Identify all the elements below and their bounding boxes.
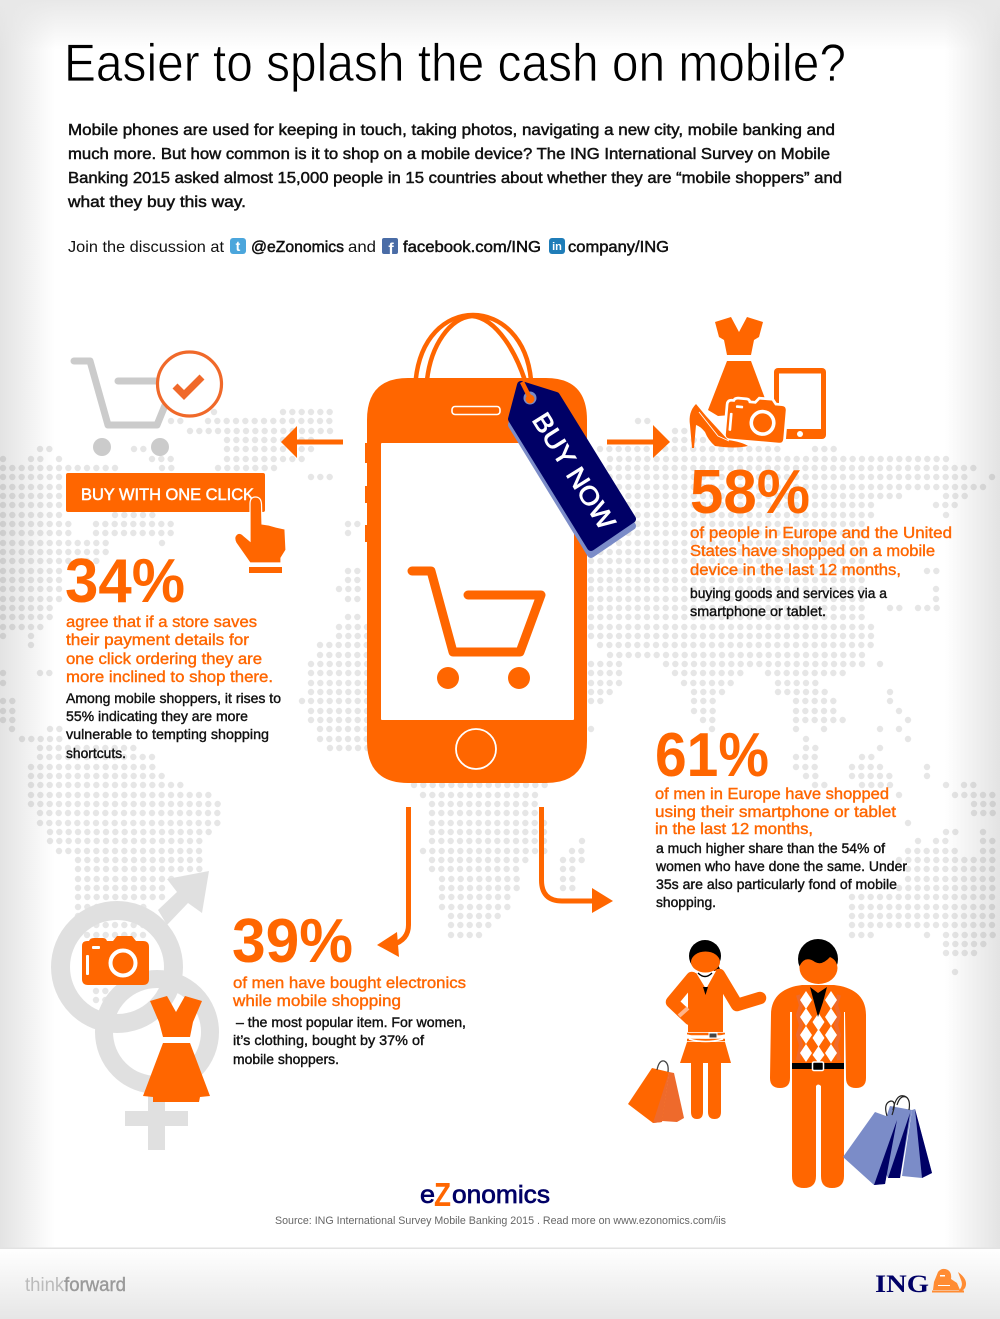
logo: eZonomics: Z <box>434 1176 451 1213</box>
stat: 39%: mobile shoppers. <box>233 1051 339 1067</box>
male symbol <box>60 871 209 1024</box>
price tag: buy now <box>512 382 632 554</box>
stat: 34%: more inclined to shop there. <box>66 669 273 686</box>
button: buy with one click: BUY WITH ONE CLICK <box>81 486 254 504</box>
stat: 61%: in the last 12 months, <box>655 821 813 838</box>
stat: 61%: of men in Europe have shopped <box>655 786 889 803</box>
stat: 39% <box>232 907 466 1067</box>
man's body <box>770 985 866 1188</box>
social links line: facebook.com/ING <box>403 239 541 256</box>
stat: 58%: of people in Europe and the United <box>690 525 952 542</box>
phone with shopping bag handles <box>365 315 587 783</box>
stat: 34%: agree that if a store saves <box>66 614 257 631</box>
social links line: company/ING <box>568 239 669 256</box>
woman's face and collar <box>691 952 720 995</box>
logo: ING with lion: ING <box>875 1271 929 1298</box>
icon: facebook: f <box>388 241 394 258</box>
title: Easier to splash the cash on mobile? <box>64 34 846 93</box>
icon: linkedin <box>549 238 565 254</box>
stat: 61%: women who have done the same. Under <box>655 858 907 874</box>
stat: 34%: Among mobile shoppers, it rises to <box>66 690 281 706</box>
dress <box>143 996 210 1102</box>
belt <box>792 1062 844 1070</box>
camera <box>82 936 149 985</box>
stat: 34%: shortcuts. <box>66 745 126 761</box>
logo: ING with lion <box>875 1269 966 1298</box>
logo: eZonomics: onomics <box>452 1181 550 1209</box>
stat: 34%: one click ordering they are <box>66 651 262 668</box>
down arrow to 39% <box>392 807 408 945</box>
stat: 61%: a much higher share than the 54% of <box>656 840 885 856</box>
stat: 61%: shopping. <box>656 894 716 910</box>
icon: pointing hand <box>235 497 286 573</box>
left arrow from phone <box>281 426 343 458</box>
icons: dress, tablet, camera, shoe <box>690 317 826 448</box>
stat: 58%: device in the last 12 months, <box>690 562 901 579</box>
social links line: and <box>348 239 376 256</box>
woman's arms <box>672 975 760 1019</box>
orange shopping bags <box>628 1061 684 1123</box>
camera <box>724 395 788 445</box>
icon: grey shopping cart with check mark <box>74 352 222 456</box>
phone body <box>365 378 587 783</box>
stat: 61%: 35s are also particularly fond of mobile <box>656 876 897 892</box>
stat: 61% <box>655 721 907 910</box>
bag handles <box>416 315 531 398</box>
stat: 39%: 39% <box>232 907 353 976</box>
stat: 34% <box>65 547 281 761</box>
stat: 58%: buying goods and services via a <box>690 585 887 601</box>
intro paragraph: much more. But how common is it to shop on a mobile device? The ING International Survey on Mobile <box>68 146 830 163</box>
stat: 61%: using their smartphone or tablet <box>655 804 897 821</box>
arrowhead: right-bending arrow <box>592 888 613 913</box>
source line: Source: ING International Survey Mobile Banking 2015 . Read more on www.ezonomics.com/iis <box>275 1215 726 1227</box>
tablet <box>774 368 826 439</box>
social links line: @eZonomics <box>251 239 344 256</box>
stat: 34%: their payment details for <box>66 632 250 649</box>
stat: 61%: 61% <box>655 721 769 790</box>
icon: facebook <box>382 238 398 258</box>
logo: eZonomics <box>420 1176 550 1213</box>
woman's body <box>680 973 731 1119</box>
speaker <box>452 406 500 414</box>
icon: cart on screen <box>412 571 541 689</box>
logo: eZonomics: e <box>420 1181 435 1209</box>
dotted world map background <box>3 412 584 1000</box>
figure: man with blue bags <box>770 939 932 1188</box>
man's head <box>798 939 838 984</box>
footer tagline: thinkforward: thinkforward <box>25 1275 126 1296</box>
stat: 39%: it’s clothing, bought by 37% of <box>233 1032 424 1048</box>
high heel shoe <box>690 404 748 448</box>
right-bending arrow to 61% <box>542 807 595 901</box>
icon: gender symbols with camera and dress <box>60 871 210 1150</box>
right arrow from phone <box>607 425 670 458</box>
stat: 58%: States have shopped on a mobile <box>690 543 935 560</box>
blue shopping bags <box>843 1096 932 1185</box>
dress <box>708 317 770 416</box>
intro paragraph <box>67 122 842 211</box>
arrowhead: down arrow <box>377 932 399 957</box>
stat: 58% <box>690 458 952 619</box>
button: buy with one click <box>66 473 265 512</box>
stat: 39%: – the most popular item. For women, <box>236 1014 466 1030</box>
stat: 34%: 34% <box>65 547 185 616</box>
stat: 34%: vulnerable to tempting shopping <box>66 726 269 742</box>
icon: twitter: t <box>236 238 241 254</box>
argyle pattern <box>798 991 839 1063</box>
icon: linkedin: in <box>552 241 562 253</box>
female symbol <box>104 979 210 1150</box>
home button <box>456 729 496 769</box>
woman's belt <box>687 1033 725 1042</box>
price tag: buy now: BUY NOW <box>526 407 622 535</box>
stat: 39%: of men have bought electronics <box>233 975 466 992</box>
icon: twitter <box>230 238 246 254</box>
phone screen <box>381 443 574 720</box>
stat: 58%: smartphone or tablet. <box>690 603 826 619</box>
tie <box>810 987 827 1017</box>
stat: 58%: 58% <box>690 458 810 527</box>
social links line <box>68 238 669 258</box>
icon: lion <box>932 1269 966 1292</box>
figure: woman with orange bags <box>628 940 760 1123</box>
stat: 39%: while mobile shopping <box>232 993 401 1010</box>
social links line: Join the discussion at <box>68 239 225 256</box>
intro paragraph: what they buy this way. <box>67 194 246 211</box>
stat: 34%: 55% indicating they are more <box>66 708 248 724</box>
intro paragraph: Mobile phones are used for keeping in touch, taking photos, navigating a new city, mobile banking and <box>68 122 835 139</box>
woman's hair and ponytail <box>689 940 721 987</box>
intro paragraph: Banking 2015 asked almost 15,000 people in 15 countries about whether they are “mobile shoppers” and <box>68 170 842 187</box>
woman's wrist band <box>679 1008 688 1016</box>
